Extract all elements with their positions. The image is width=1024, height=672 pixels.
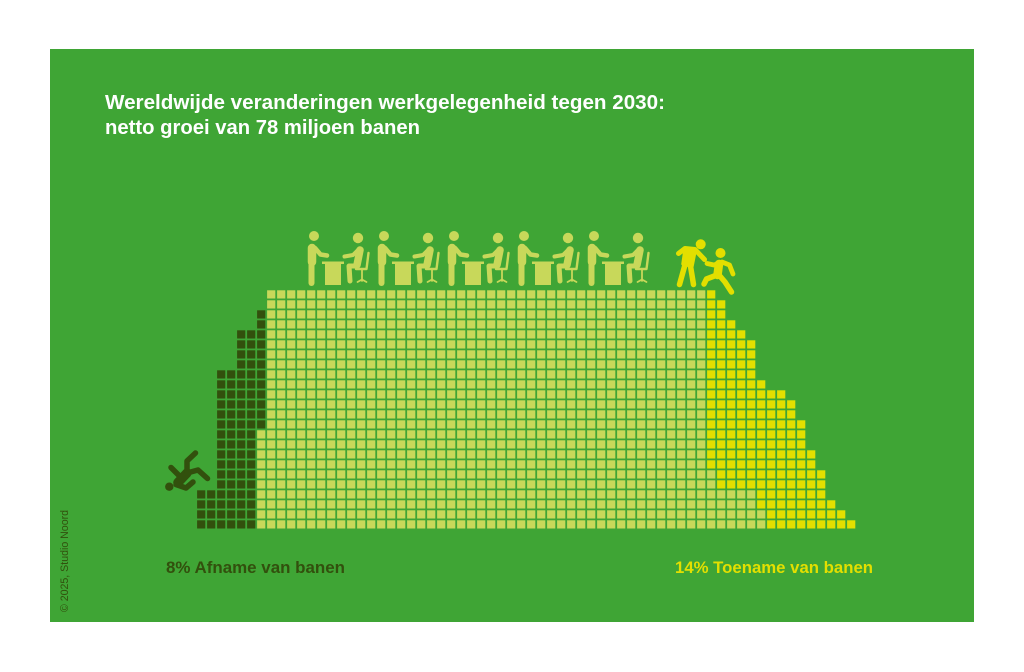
title xyxy=(105,91,665,139)
growing jobs squares xyxy=(707,290,857,530)
panel: green background xyxy=(50,49,974,622)
copyright credit: © 2025, Studio Noord xyxy=(59,510,71,612)
label: job decrease: 8% Afname van banen xyxy=(166,558,345,577)
icon: two running figures helping each other xyxy=(678,239,733,292)
stable jobs squares xyxy=(257,290,767,530)
title: Wereldwijde veranderingen werkgelegenheid tegen 2030: xyxy=(105,91,665,114)
label: job increase: 14% Toename van banen xyxy=(675,558,873,577)
icon: falling figure xyxy=(165,453,208,491)
waffle chart: jobs xyxy=(197,290,857,530)
declining jobs squares xyxy=(197,310,267,530)
icon: row of office workers at desks xyxy=(309,231,648,285)
title: netto groei van 78 miljoen banen xyxy=(105,116,420,139)
